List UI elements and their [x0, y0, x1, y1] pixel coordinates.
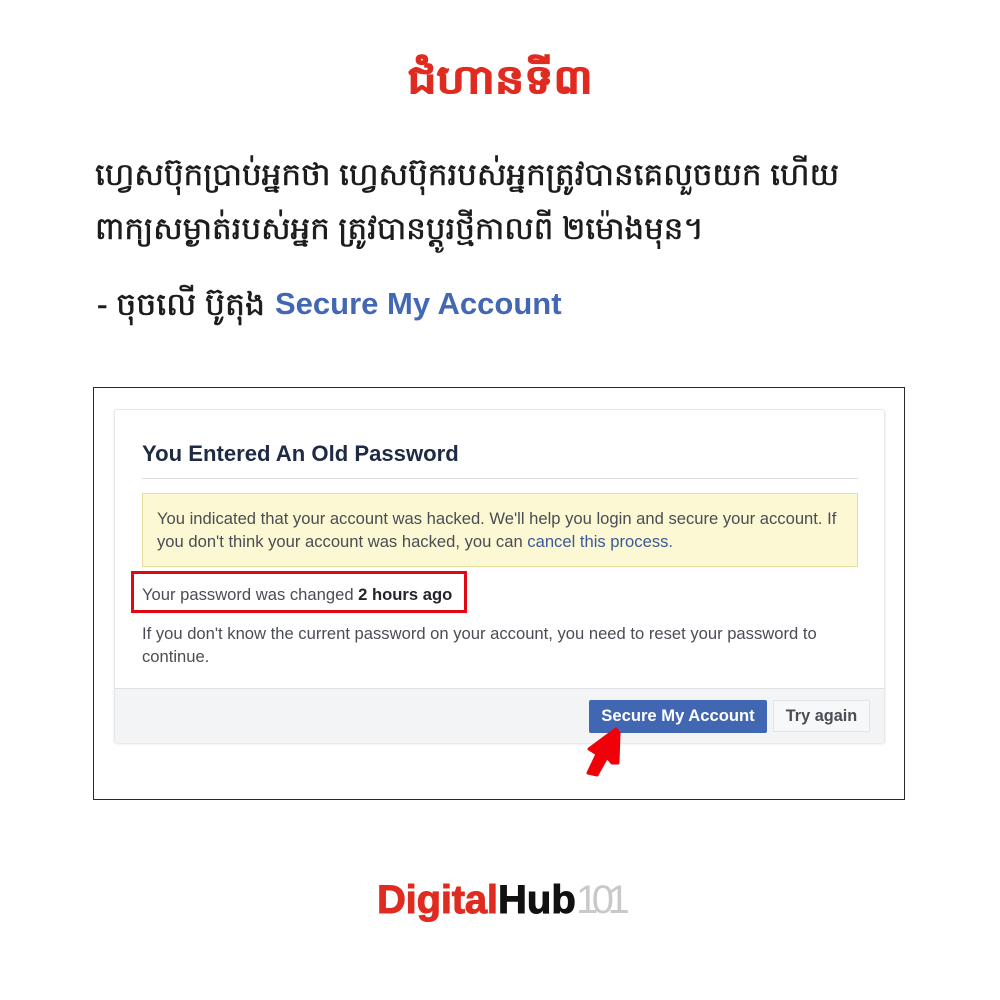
title: ជំហានទី៣ — [407, 57, 593, 101]
instruction line — [97, 284, 562, 326]
heading rule — [142, 478, 858, 479]
button: secure my account — [589, 700, 767, 733]
red highlight box — [131, 571, 467, 613]
panel: dialog card — [114, 409, 885, 743]
dialog heading: You Entered An Old Password — [142, 441, 459, 466]
password changed text: Your password was changed 2 hours ago — [142, 585, 452, 604]
logo: 101 — [576, 878, 623, 922]
notice text — [157, 509, 836, 551]
reset password text: If you don't know the current password on your account, you need to reset your password to — [142, 624, 817, 643]
notice text: you don't think your account was hacked, you can cancel this process. — [157, 532, 673, 551]
yellow notice — [142, 493, 858, 567]
button: try again — [773, 700, 870, 732]
instruction line: - ចុចលើ ប៊ូតុង — [97, 286, 265, 322]
reset password text — [142, 624, 817, 666]
reset password text: continue. — [142, 647, 209, 666]
icon: red arrow — [586, 727, 620, 776]
button: try again: Try again — [786, 707, 857, 725]
panel: screenshot frame — [93, 387, 905, 800]
logo: Hub — [498, 878, 576, 922]
logo: Digital — [377, 878, 498, 922]
logo — [377, 878, 628, 922]
body text line 2: ពាក្យសម្ងាត់របស់អ្នក ត្រូវបានប្តូរថ្មីកាលពី ២ម៉ោងមុន។ — [95, 211, 704, 246]
footer bar — [115, 688, 884, 743]
notice text: You indicated that your account was hacked. We'll help you login and secure your account. If — [157, 509, 836, 528]
instruction line: Secure My Account — [275, 286, 562, 321]
body text line 1: ហ្វេសប៊ុកប្រាប់អ្នកថា ហ្វេសប៊ុករបស់អ្នកត្រូវបានគេលួចយក ហើយ — [95, 157, 839, 192]
button: secure my account: Secure My Account — [601, 706, 755, 725]
